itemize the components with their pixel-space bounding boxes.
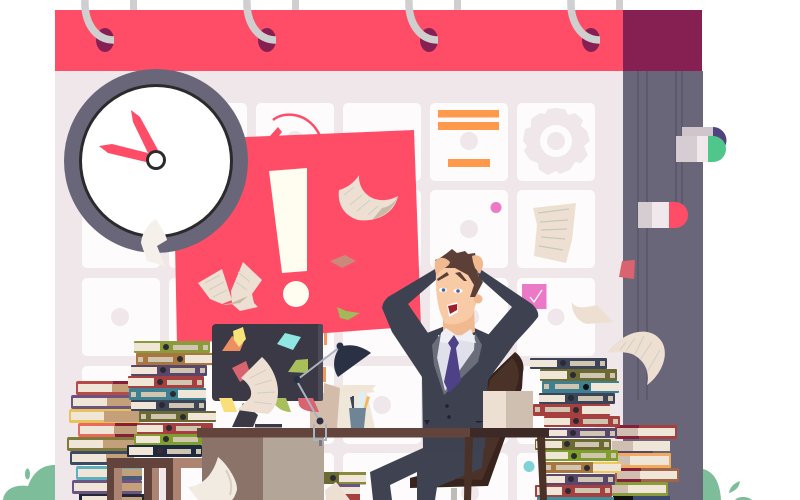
plant right	[703, 469, 752, 500]
large flying paper	[237, 357, 278, 414]
head	[436, 265, 479, 324]
plant left	[3, 465, 55, 500]
vest buttons	[445, 404, 449, 408]
stressed businessman	[370, 249, 538, 500]
paper box on desk	[483, 391, 533, 428]
spiral binding rings	[85, 0, 623, 52]
flying paper: small curl	[572, 302, 613, 324]
tie	[444, 335, 461, 393]
neck	[443, 310, 475, 338]
icon: gear	[523, 108, 590, 175]
face details	[437, 272, 467, 281]
icon: red arc in cell	[273, 115, 320, 136]
desk lamp	[294, 342, 371, 446]
binder stack right front	[530, 358, 621, 500]
clock	[64, 69, 248, 266]
desk clutter: boxes, pencil cup	[310, 333, 376, 428]
scrap: red note on side panel	[619, 260, 635, 279]
hands	[435, 258, 450, 276]
teal dot	[524, 461, 534, 472]
flying paper: right curl	[607, 332, 665, 385]
stool	[107, 458, 202, 500]
lapels	[432, 333, 482, 395]
side tab: red	[638, 202, 688, 228]
binder stack left front	[127, 341, 216, 457]
red alert note	[173, 130, 421, 344]
calendar day cells	[82, 103, 595, 500]
right arm	[477, 269, 538, 380]
pink checkbox	[522, 284, 546, 309]
shirt	[437, 335, 476, 394]
paper in cell	[533, 203, 576, 263]
desk	[197, 428, 549, 500]
collar	[440, 328, 476, 344]
flying paper: curled pair	[198, 262, 262, 311]
exclamation mark	[269, 168, 309, 307]
icon: orange list note	[438, 110, 499, 167]
hair	[435, 249, 483, 297]
flying paper under desk	[188, 457, 237, 500]
side tab: purple and green	[676, 127, 726, 162]
calendar	[55, 10, 703, 500]
legs	[370, 446, 484, 500]
small stack below desk	[324, 472, 366, 500]
book stack left back	[67, 381, 145, 500]
flying paper: crescent	[339, 175, 398, 220]
left arm	[382, 269, 438, 380]
sticky notes on screen	[219, 327, 319, 412]
chair	[410, 352, 524, 500]
flying paper scraps on note	[330, 255, 356, 268]
torso	[422, 326, 490, 452]
pink dot	[490, 202, 502, 213]
book stack right back	[612, 425, 679, 500]
monitor	[212, 324, 323, 428]
